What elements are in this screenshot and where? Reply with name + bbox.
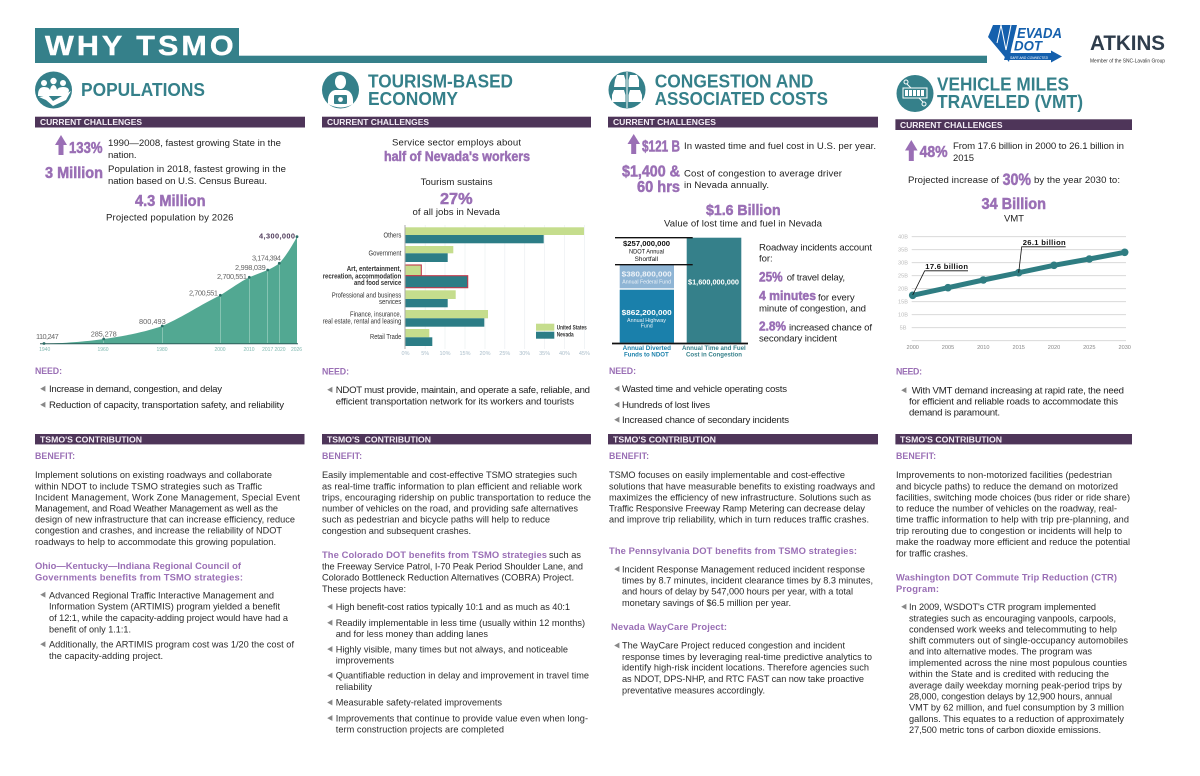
benefit text: congestion and crashes, and increase the reliability of NDOT: [35, 526, 282, 536]
Washington list: gallons. This equates to a reduction of approximately: [909, 714, 1124, 724]
need list: demand is paramount.: [909, 408, 1000, 419]
bar chart: jobs by sector: Art, entertainment,: [347, 266, 401, 273]
Washington list: 27,500 metric tons of carbon dioxide emissions.: [909, 725, 1101, 735]
Washington list: In 2009, WSDOT's CTR program implemented: [909, 602, 1096, 612]
benefit text: number of vehicles on the road, and providing safe alternatives: [322, 504, 578, 514]
bar chart: jobs by sector: Retail Trade: [370, 334, 401, 341]
area chart: population: 4,300,000: [259, 232, 295, 241]
need list: Increase in demand, congestion, and delay: [49, 384, 222, 395]
roadway incidents callout: of travel delay,: [787, 272, 845, 283]
stat: 133%: 133%: [69, 140, 103, 157]
heading: populations: POPULATIONS: [81, 80, 205, 100]
subheading: Washington DOT: Washington DOT Commute Trip Reduction (CTR): [896, 572, 1117, 583]
benefit text: such as pedestrian and bicycle paths will help to reduce: [322, 515, 550, 525]
benefit text: congestion and subsequent crashes.: [322, 526, 471, 536]
Ohio list: Additionally, the ARTIMIS program cost was 1/20 the cost of: [49, 640, 294, 650]
subheading: Pennsylvania DOT: The Pennsylvania DOT benefits from TSMO strategies:: [609, 545, 857, 556]
bar chart: jobs by sector: and food service: [354, 280, 401, 287]
roadway incidents callout: 2.8%: [759, 319, 786, 334]
roadway incidents callout: for:: [759, 253, 773, 264]
stacked bar chart: funding vs cost: Fund: [641, 324, 653, 330]
bar chart: jobs by sector: 35%: [539, 351, 550, 357]
stacked bar chart: funding vs cost: Annual Time and Fuel: [682, 345, 746, 352]
area chart: population: 1960: [97, 347, 109, 353]
stacked bar chart: funding vs cost: Annual Highway: [627, 318, 666, 324]
need heading: NEED:: [35, 366, 62, 376]
Ohio list: of 12:1, while the capacity-adding project would have had a: [49, 613, 289, 623]
current challenges bar: CURRENT CHALLENGES: [900, 120, 1003, 130]
panel: tourism-based economy: [322, 72, 591, 735]
stacked bar chart: funding vs cost: [612, 238, 748, 359]
bar chart: jobs by sector: Government: [368, 251, 401, 258]
title banner: WHY TSMO: [45, 30, 237, 62]
line chart: VMT: [898, 235, 1131, 351]
need heading: NEED:: [896, 367, 922, 377]
Washington list: 28,000, congestion delays by 12,900 hours, annual: [909, 691, 1112, 701]
Colorado list: Readily implementable in less time (usually within 12 months): [336, 618, 585, 628]
panel: vehicle miles traveled: [895, 75, 1132, 735]
stat: $1,400 and 60 hrs: $1,400 &: [622, 164, 680, 181]
title banner: [35, 28, 987, 63]
need list: [328, 385, 590, 407]
Ohio list: the capacity-adding project.: [49, 651, 163, 661]
Colorado list: Improvements that continue to provide value even when long-: [336, 713, 588, 723]
stat: half of workers: half of Nevada's workers: [384, 149, 530, 164]
contribution bar: [322, 434, 591, 444]
need list: Increased chance of secondary incidents: [622, 415, 789, 426]
stat: 4.3 million: 4.3 Million: [135, 193, 206, 210]
subheading: Washington DOT: [896, 572, 1117, 594]
Washington list: condensed work weeks and telecommuting to help: [909, 624, 1117, 634]
stat text: nation.: [108, 150, 137, 161]
area chart: population: 3,174,394: [252, 254, 281, 263]
benefit text: solutions that have measurable benefits to existing roadways and: [609, 481, 875, 491]
heading: congestion: CONGESTION AND: [655, 72, 814, 92]
need list: [902, 385, 1124, 419]
icon: up arrow: [905, 140, 918, 161]
line chart: VMT: 2015: [1012, 345, 1025, 351]
roadway incidents callout: secondary incident: [759, 334, 837, 345]
contribution bar: [35, 434, 304, 444]
benefit text: trip rerouting due to congestion or incidents will help to: [896, 526, 1122, 536]
stat: $1,400 and 60 hrs: 60 hrs: [637, 179, 680, 196]
contribution bar: TSMO'S CONTRIBUTION: [40, 434, 142, 444]
stacked bar chart: funding vs cost: $1,600,000,000: [688, 278, 739, 287]
logo: Atkins: [1090, 32, 1165, 64]
stat: 30% projected increase: Projected increase of: [908, 175, 999, 186]
icon: up arrow: [628, 134, 640, 154]
benefit text: maximizes the efficiency of new infrastructure. Solutions such as: [609, 492, 871, 502]
roadway incidents callout: 4 minutes: [759, 288, 816, 303]
line chart: VMT: 5B: [900, 326, 907, 332]
WayCare list: The WayCare Project reduced congestion and incident: [622, 641, 845, 651]
stacked bar chart: funding vs cost: Annual Diverted: [623, 345, 671, 352]
benefit text: roadways to help to accommodate this growing population.: [35, 537, 276, 547]
stat text: Tourism sustains: [421, 177, 493, 188]
subheading: Colorado DOT: The Colorado DOT benefits from TSMO strategies: [322, 549, 547, 560]
line chart: VMT: 17.6 billion: [925, 262, 968, 271]
logo: Atkins: Member of the SNC-Lavalin Group: [1090, 58, 1165, 64]
benefit text: [609, 470, 875, 525]
benefit text: trips, encouraging ridership on public transportation to reduce the: [322, 492, 591, 502]
heading: congestion: [655, 72, 828, 109]
Washington list: average daily weekday morning peak-period trips by: [909, 680, 1122, 690]
stacked bar chart: funding vs cost: Funds to NDOT: [624, 352, 669, 359]
benefit text: for traffic crashes.: [896, 548, 968, 558]
benefit heading: BENEFIT:: [609, 451, 649, 461]
Washington list: [902, 602, 1128, 735]
subheading: Colorado DOT: the Freeway Service Patrol, I-70 Peak Period Shoulder Lane, and: [322, 561, 583, 571]
heading: vmt: TRAVELED (VMT): [937, 92, 1083, 112]
current challenges bar: CURRENT CHALLENGES: [40, 117, 142, 127]
bar chart: jobs by sector: 5%: [421, 351, 429, 357]
line chart: VMT: 40B: [898, 235, 908, 241]
stat: $1,400 and 60 hrs: [622, 164, 680, 196]
benefit text: facilities, switching mode choices (bus rider or ride share): [896, 492, 1130, 502]
stacked bar chart: funding vs cost: $862,200,000: [622, 308, 672, 317]
current challenges bar: [895, 119, 1132, 130]
stat text: [108, 164, 286, 187]
Ohio list: Advanced Regional Traffic Interactive Management and: [49, 590, 274, 600]
line chart: VMT: 30B: [898, 261, 908, 267]
bar chart: jobs by sector: 15%: [459, 351, 471, 357]
area chart: population: 110,247: [36, 332, 59, 341]
benefit text: Easily implementable and cost-effective TSMO strategies such: [322, 470, 577, 480]
stacked bar chart: funding vs cost: $257,000,000: [623, 239, 670, 248]
contribution bar: [895, 434, 1132, 444]
need list: [615, 384, 789, 426]
area chart: population: [36, 232, 302, 353]
stat text: nation based on U.S. Census Bureau.: [108, 176, 267, 187]
roadway incidents callout: Roadway incidents account: [759, 242, 872, 253]
WayCare list: response times by leveraging real-time predictive analytics to: [622, 652, 872, 662]
stacked bar chart: funding vs cost: Shortfall: [635, 256, 658, 263]
Pennsylvania list: and hours of delay by 547,000 hours per year, with a total: [622, 587, 853, 597]
area chart: population: 2,998,039: [235, 263, 266, 272]
benefit text: Traffic Responsive Freeway Ramp Metering can decrease delay: [609, 504, 865, 514]
benefit text: and bicycle paths) to reduce the demand on motorized: [896, 481, 1118, 491]
Washington list: implemented across the nine most populous counties: [909, 658, 1127, 668]
area chart: population: 2010: [243, 347, 255, 353]
Colorado list: High benefit-cost ratios typically 10:1 and as much as 40:1: [336, 602, 570, 612]
bar chart: jobs by sector: services: [379, 299, 402, 306]
Colorado list: Quantifiable reduction in delay and improvement in travel time: [336, 671, 589, 681]
Pennsylvania list: [615, 564, 873, 608]
stacked bar chart: funding vs cost: Cost in Congestion: [686, 352, 742, 359]
contribution bar: TSMO'S CONTRIBUTION: [613, 434, 716, 444]
benefit text: Improvements to non-motorized facilities (pedestrian: [896, 470, 1112, 480]
heading: vmt: VEHICLE MILES: [937, 75, 1069, 95]
line chart: VMT: 2030: [1118, 345, 1131, 351]
benefit text: time traffic information to help with trip pre-planning, and: [896, 515, 1129, 525]
contribution bar: TSMO'S CONTRIBUTION: [900, 434, 1002, 444]
Washington list: and into alternative modes. The program was: [909, 647, 1092, 657]
bar chart: jobs by sector: Nevada: [557, 333, 574, 339]
benefit text: [896, 470, 1130, 558]
subheading: Colorado DOT: These projects have:: [322, 584, 406, 594]
icon: people: [35, 72, 72, 108]
logo: Nevada DOT: EVADA: [1017, 25, 1062, 42]
line chart: VMT: 2000: [906, 345, 919, 351]
line chart: VMT: 20B: [898, 287, 908, 293]
stat: 27%: 27%: [440, 191, 473, 208]
area chart: population: 2,700,551: [189, 289, 218, 298]
bar chart: jobs by sector: 25%: [499, 351, 510, 357]
area chart: population: 1980: [156, 347, 168, 353]
stacked bar chart: funding vs cost: NDOT Annual: [629, 248, 664, 255]
subheading: Nevada WayCare: Nevada WayCare Project:: [611, 621, 727, 632]
stat: 30% projected increase: by the year 2030 to:: [1034, 175, 1120, 186]
WayCare list: preventative measures accordingly.: [622, 685, 765, 695]
heading: tourism: TOURISM-BASED: [368, 72, 513, 92]
current challenges bar: [322, 117, 591, 128]
panel: congestion and associated costs: [608, 72, 878, 695]
stat text: 2015: [953, 153, 974, 164]
bar chart: jobs by sector: 45%: [579, 351, 590, 357]
subheading: Colorado DOT: such as: [549, 550, 581, 560]
benefit text: Implement solutions on existing roadways and collaborate: [35, 470, 272, 480]
Colorado list: [328, 602, 589, 735]
roadway incidents callout: for every: [818, 292, 855, 303]
benefit text: make the roadway more efficient and reduce the potential: [896, 537, 1130, 547]
bar chart: jobs by sector: recreation, accommodation: [323, 273, 401, 280]
benefit text: [34, 470, 300, 547]
icon: tourist with camera: [322, 72, 359, 108]
subheading: Colorado DOT: Colorado Bottleneck Reduction Alternatives (COBRA) Project.: [322, 573, 574, 583]
logo: Atkins: ATKINS: [1090, 32, 1165, 55]
roadway incidents callout: minute of congestion, and: [759, 303, 866, 314]
subheading: Colorado DOT: [322, 549, 583, 594]
logo: Nevada DOT: DOT: [1014, 38, 1043, 54]
area chart: population: 1940: [39, 347, 50, 353]
subheading: Ohio Kentucky Indiana: [35, 560, 243, 582]
stat text: In wasted time and fuel cost in U.S. per year.: [684, 141, 876, 152]
line chart: VMT: 35B: [898, 248, 908, 254]
subheading: Ohio Kentucky Indiana: Ohio—Kentucky—Indiana Regional Council of: [35, 560, 242, 571]
area chart: population: 2020: [274, 347, 286, 353]
stat: 30% projected increase: 30%: [1003, 171, 1031, 189]
Pennsylvania list: Incident Response Management reduced incident response: [622, 564, 865, 574]
area chart: population: 800,493: [139, 317, 166, 326]
benefit heading: BENEFIT:: [896, 451, 936, 461]
line chart: VMT: 2010: [977, 345, 990, 351]
stat text: Cost of congestion to average driver: [684, 169, 843, 180]
area chart: population: 285,278: [91, 330, 117, 339]
need list: for efficient and reliable roads to accommodate this: [909, 397, 1118, 408]
Pennsylvania list: monetary savings of $6.5 million per year.: [622, 598, 791, 608]
line chart: VMT: 25B: [898, 274, 908, 280]
heading: tourism: [368, 72, 513, 109]
Pennsylvania list: times by 8.7 minutes, incident clearance times by 8.3 minutes,: [622, 576, 873, 586]
stat text: [108, 138, 281, 161]
area chart: population: 2000: [214, 347, 226, 353]
line chart: VMT: 15B: [898, 300, 908, 306]
Washington list: VMT by 62 million, and fuel consumption by 3 million: [909, 703, 1124, 713]
line chart: VMT: 10B: [898, 313, 908, 319]
line chart: VMT: 2025: [1083, 345, 1096, 351]
roadway incidents callout: [759, 242, 872, 345]
current challenges bar: CURRENT CHALLENGES: [613, 117, 716, 127]
bar chart: jobs by sector: 40%: [559, 351, 570, 357]
line chart: VMT: 26.1 billion: [1023, 238, 1066, 247]
stat text: [684, 169, 843, 191]
stat text: [953, 141, 1124, 164]
need list: efficient transportation network for its workers and tourists: [336, 396, 574, 407]
heading: vmt: [937, 75, 1083, 112]
Colorado list: improvements: [336, 656, 394, 666]
benefit text: design of new infrastructure that can increase efficiency, reduce: [35, 515, 295, 525]
Ohio list: benefit of only 1.1:1.: [49, 624, 131, 634]
Colorado list: and for less money than adding lanes: [336, 629, 488, 639]
Ohio list: [41, 590, 294, 661]
icon: up arrow: [55, 135, 67, 155]
need list: With VMT demand increasing at rapid rate, the need: [912, 385, 1124, 396]
need list: NDOT must provide, maintain, and operate a safe, reliable, and: [336, 385, 590, 396]
stat text: Population in 2018, fastest growing in the: [108, 164, 286, 175]
Washington list: shift commuters out of single-occupancy automobiles: [909, 635, 1128, 645]
Colorado list: Highly visible, many times but not always, and noticeable: [336, 644, 568, 654]
contribution bar: [608, 434, 878, 444]
panel: populations: [34, 72, 305, 661]
benefit text: Management, and Road Weather Management as well as the: [35, 504, 278, 514]
logo: Nevada DOT: SAFE AND CONNECTED: [1010, 55, 1048, 60]
stat: 30% projected increase: [908, 171, 1120, 189]
icon: odometer: [896, 75, 934, 112]
benefit text: to reduce the number of vehicles on the roadway, real-: [896, 504, 1117, 514]
contribution bar: TSMO'S CONTRIBUTION: [327, 434, 431, 444]
bar chart: jobs by sector: 20%: [479, 351, 491, 357]
need list: Wasted time and vehicle operating costs: [622, 384, 787, 395]
line chart: VMT: 2005: [942, 345, 954, 351]
benefit text: and improve trip reliability, which in turn reduces traffic crashes.: [609, 515, 869, 525]
heading: congestion: ASSOCIATED COSTS: [655, 89, 828, 109]
stat text: 1990—2008, fastest growing State in the: [108, 138, 281, 149]
stat caption: VMT: [1004, 214, 1024, 225]
stat: 3 million: 3 Million: [45, 165, 103, 182]
stat caption: of all jobs in Nevada: [412, 207, 501, 218]
heading: tourism: ECONOMY: [368, 89, 458, 109]
bar chart: jobs by sector: 0%: [402, 351, 410, 357]
benefit text: TSMO focuses on easily implementable and cost-effective: [609, 470, 845, 480]
benefit text: within NDOT to include TSMO strategies such as Traffic: [34, 481, 262, 491]
bar chart: jobs by sector: 10%: [439, 351, 451, 357]
stat text: in Nevada annually.: [684, 180, 769, 191]
roadway incidents callout: increased chance of: [789, 323, 872, 334]
current challenges bar: [608, 117, 878, 128]
bar chart: jobs by sector: real estate, rental and leasing: [323, 318, 401, 325]
stat caption: Value of lost time and fuel in Nevada: [664, 219, 823, 230]
area chart: population: 2,700,551: [217, 272, 247, 281]
need list: Hundreds of lost lives: [622, 400, 710, 411]
WayCare list: identify high-risk incident locations. Therefore agencies such: [622, 663, 869, 673]
stat: $1.6 billion: $1.6 Billion: [706, 202, 781, 219]
bar chart: jobs by sector: Finance, insurance,: [350, 312, 401, 319]
bar chart: jobs by sector: [323, 225, 590, 357]
need heading: NEED:: [609, 366, 636, 376]
benefit text: Incident Management, Work Zone Management, Special Event: [35, 492, 300, 502]
stat: $121 B: $121 B: [642, 139, 680, 156]
need heading: NEED:: [322, 366, 349, 376]
benefit heading: BENEFIT:: [35, 451, 75, 461]
benefit text: [322, 470, 591, 536]
line chart: VMT: 2020: [1048, 345, 1060, 351]
bar chart: jobs by sector: Professional and business: [332, 292, 402, 299]
current challenges bar: CURRENT CHALLENGES: [327, 117, 429, 127]
Colorado list: Measurable safety-related improvements: [336, 698, 502, 708]
Washington list: within the State and is credited with reducing the: [908, 669, 1109, 679]
stat: 34 billion: 34 Billion: [982, 196, 1046, 213]
benefit heading: BENEFIT:: [322, 451, 362, 461]
area chart: population: 2017: [262, 347, 273, 353]
subheading: Ohio Kentucky Indiana: Governments benefits from TSMO strategies:: [35, 571, 243, 582]
need list: Reduction of capacity, transportation safety, and reliability: [49, 400, 284, 411]
stacked bar chart: funding vs cost: $380,800,000: [622, 270, 672, 279]
area chart: population: 2026: [291, 347, 302, 353]
need list: [41, 384, 284, 411]
benefit text: as real-time traffic information to plan efficient and reliable work: [322, 481, 582, 491]
stacked bar chart: funding vs cost: Annual Federal Fund: [622, 280, 671, 286]
Ohio list: Information System (ARTIMIS) program yielded a benefit: [49, 602, 280, 612]
bar chart: jobs by sector: 30%: [519, 351, 530, 357]
caption: Projected population by 2026: [106, 213, 234, 224]
icon: traffic: [608, 72, 646, 108]
Colorado list: term construction projects are completed: [336, 725, 504, 735]
subheading: Washington DOT: Program:: [896, 583, 939, 594]
stat text: From 17.6 billion in 2000 to 26.1 billion in: [953, 141, 1124, 152]
stat: 48%: 48%: [920, 144, 948, 161]
Washington list: strategies such as encouraging vanpools, carpools,: [909, 613, 1116, 623]
logo: Nevada DOT: [988, 25, 1062, 62]
WayCare list: [615, 641, 872, 695]
current challenges bar: [35, 117, 305, 128]
Colorado list: reliability: [336, 682, 372, 692]
bar chart: jobs by sector: Others: [384, 233, 402, 240]
stat text: Service sector employs about: [392, 138, 521, 149]
roadway incidents callout: 25%: [759, 269, 783, 284]
bar chart: jobs by sector: United States: [557, 325, 587, 331]
WayCare list: as NDOT, DPS-NHP, and RTC FAST can now take proactive: [622, 674, 864, 684]
